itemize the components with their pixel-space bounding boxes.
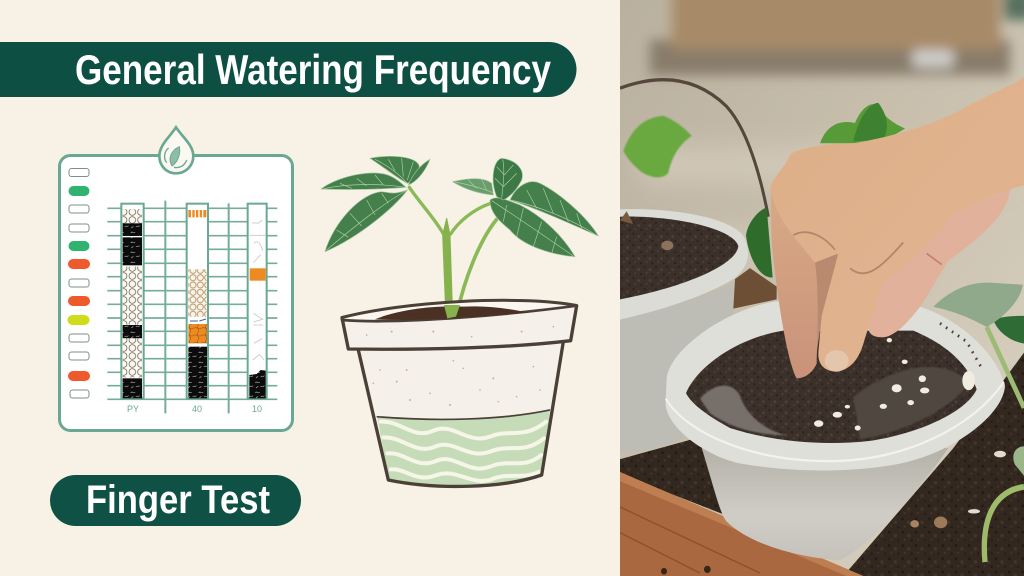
soil	[375, 306, 528, 320]
pot speckles	[366, 326, 554, 406]
left background panel	[0, 0, 620, 576]
icon: water drop with leaf	[159, 127, 193, 173]
soil column chart	[107, 201, 277, 413]
back pot	[620, 209, 748, 452]
axis labels: 10	[252, 404, 262, 414]
hand	[770, 77, 1024, 378]
back fingers	[868, 189, 1010, 337]
blurred crate	[650, 0, 1024, 75]
title banner	[0, 42, 576, 97]
wooden planter edge	[620, 472, 863, 576]
index finger	[770, 190, 818, 378]
leaf veins	[323, 158, 597, 256]
axis labels: PY	[127, 404, 139, 414]
pot	[342, 300, 577, 486]
leaves	[321, 156, 598, 257]
title banner: General Watering Frequency	[75, 46, 552, 93]
ground soil	[620, 353, 1024, 576]
stems	[409, 187, 497, 318]
palm and thumb	[770, 77, 1024, 372]
right seedling	[933, 283, 1024, 562]
illustration: potted plant	[321, 156, 598, 486]
legend pills	[68, 168, 90, 398]
column 1	[121, 204, 144, 398]
axis labels	[127, 404, 262, 414]
wooden box behind	[733, 268, 777, 309]
fertilizer pellets	[814, 338, 975, 431]
photo: hand testing soil in pot	[620, 0, 1024, 576]
shadow between fingers	[815, 254, 838, 352]
arched stem	[620, 80, 768, 217]
label: Finger Test: Finger Test	[86, 478, 270, 522]
front pot	[666, 301, 1005, 560]
pot rim	[342, 300, 577, 349]
panel: soil chart card	[60, 127, 292, 431]
column 3	[248, 204, 267, 398]
axis labels: 40	[192, 404, 202, 414]
leaves in background	[623, 103, 905, 277]
column 2	[187, 204, 208, 398]
